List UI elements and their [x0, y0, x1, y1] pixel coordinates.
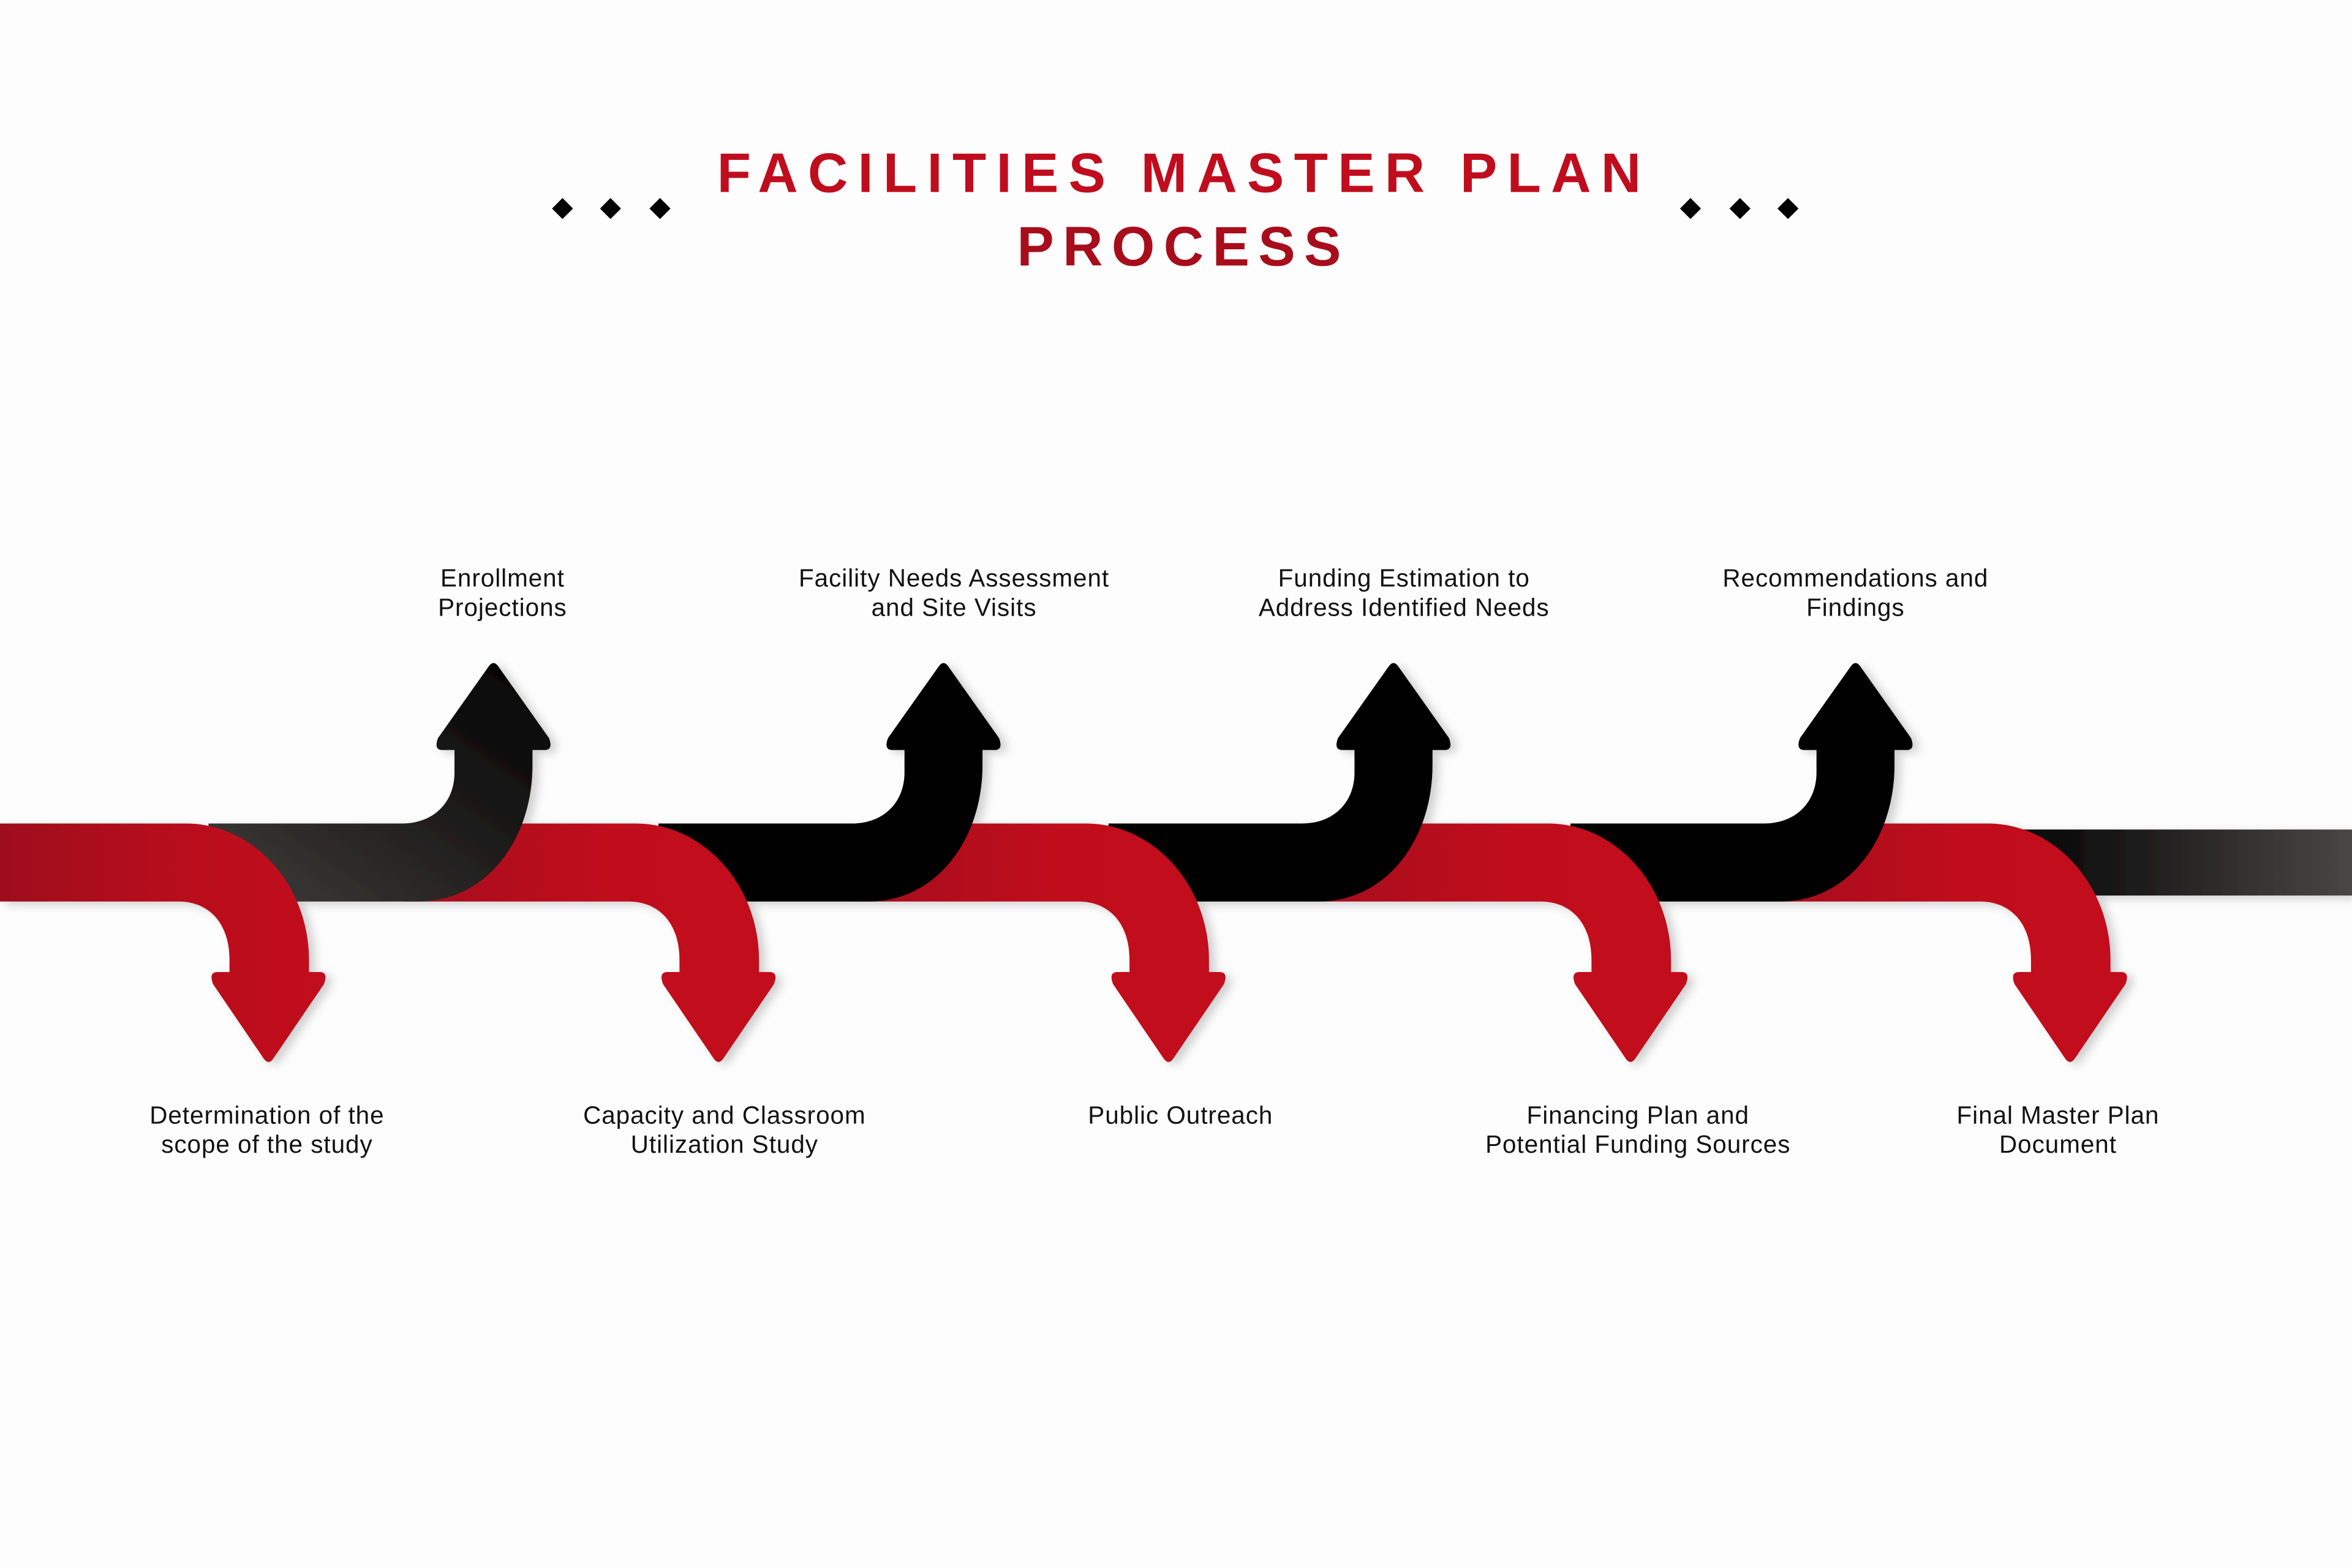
label: Enrollment Projections: Projections	[438, 593, 567, 621]
label: Enrollment Projections: Enrollment	[440, 564, 565, 592]
label: Final Master Plan: Final Master Plan	[1957, 1101, 2159, 1129]
label: Financing Plan: Potential Funding Sources	[1485, 1130, 1790, 1158]
label: Final Master Plan: Document	[1999, 1130, 2117, 1158]
label: Facility Needs Assessment: Facility Needs Assessment	[799, 564, 1109, 592]
process arrows	[0, 663, 2352, 1062]
arrow: black 1	[208, 663, 551, 902]
arrow: black 4	[1570, 663, 1912, 902]
title: PROCESS	[1017, 216, 1341, 278]
title: FACILITIES MASTER PLAN	[717, 143, 1641, 205]
label: Recommendations: Recommendations and	[1722, 564, 1988, 592]
icon: right diamonds	[1680, 198, 1798, 219]
label: Recommendations: Findings	[1806, 593, 1905, 621]
arrow: red 2	[404, 824, 775, 1062]
arrow: red 3	[853, 824, 1226, 1062]
arrow: red 1	[0, 824, 325, 1062]
label: Financing Plan: Financing Plan and	[1527, 1101, 1749, 1129]
arrow: red 5	[1765, 824, 2127, 1062]
title	[717, 143, 1641, 278]
label: Capacity study: Capacity and Classroom	[583, 1101, 866, 1129]
label: Determination of scope: scope of the study	[161, 1130, 373, 1158]
arrow: black 3	[1109, 663, 1450, 902]
label: Funding Estimation: Address Identified Needs	[1259, 593, 1550, 621]
icon: left diamonds	[552, 198, 671, 219]
black tail band	[1995, 829, 2352, 895]
arrow: red 4	[1303, 824, 1687, 1062]
label: Public Outreach: Public Outreach	[1088, 1101, 1273, 1129]
label: Facility Needs Assessment: and Site Visits	[872, 593, 1037, 621]
label: Capacity study: Utilization Study	[631, 1130, 818, 1158]
bottom labels	[149, 1101, 2159, 1158]
label: Determination of scope: Determination of the	[149, 1101, 385, 1129]
label: Funding Estimation: Funding Estimation to	[1278, 564, 1530, 592]
top labels	[438, 564, 1988, 621]
arrow: black 2	[658, 663, 1000, 902]
